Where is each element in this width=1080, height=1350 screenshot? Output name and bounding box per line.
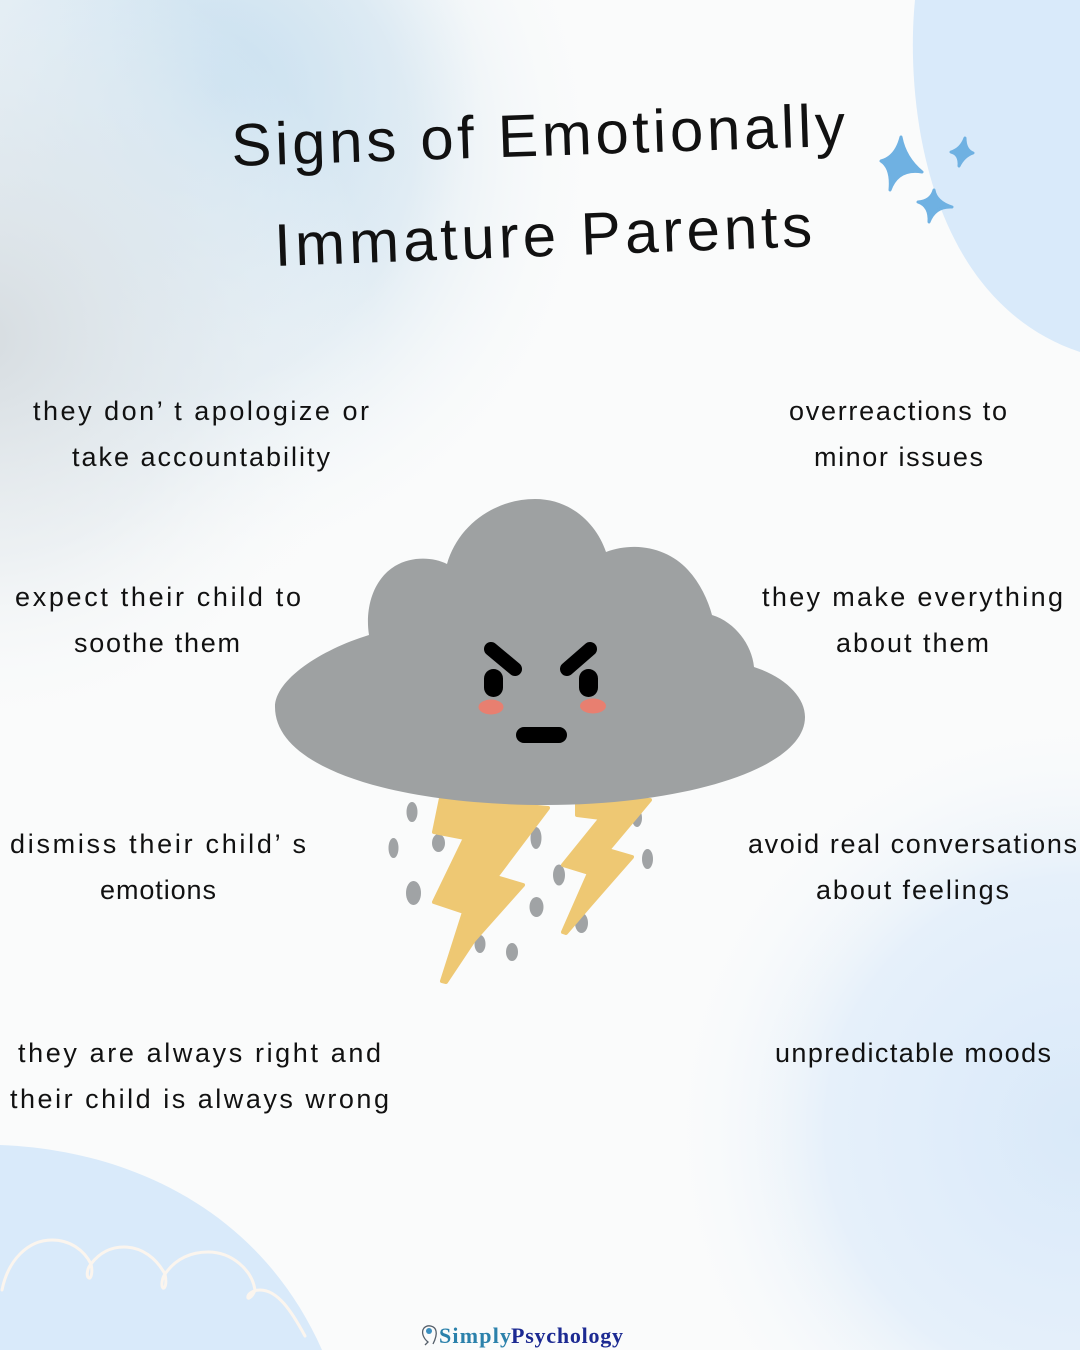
text block: dismiss emotions: [10, 829, 306, 905]
text block: moods: unpredictable moods: [775, 1038, 1051, 1068]
icon: sparkles: [881, 137, 973, 222]
text block: everything about them: about them: [836, 628, 989, 658]
text block: overreactions: [789, 396, 1007, 472]
face: [478, 649, 606, 743]
title: [230, 92, 846, 279]
logo: Simply Psychology: Psychology: [511, 1323, 623, 1348]
text block: soothe: expect their child to: [15, 582, 301, 612]
doodle: cloud outline: [2, 1240, 305, 1336]
text block: avoid conversations: avoid real conversations: [748, 829, 1077, 859]
text block: avoid conversations: about feelings: [816, 875, 1009, 905]
corner shape: bottom left: [0, 1145, 322, 1350]
text block: dismiss emotions: emotions: [100, 875, 216, 905]
text block: dismiss emotions: dismiss their child’ s: [10, 829, 306, 859]
logo: Simply Psychology: [423, 1323, 623, 1348]
text block: overreactions: overreactions to: [789, 396, 1007, 426]
text block: always right: they are always right and: [18, 1038, 381, 1068]
text block: apologize: take accountability: [72, 442, 330, 472]
text block: soothe: [15, 582, 301, 658]
icon: head: [423, 1326, 436, 1345]
text block: apologize: they don’ t apologize or: [33, 396, 369, 426]
icon: storm cloud: [275, 499, 805, 982]
text block: always right: their child is always wrong: [10, 1084, 389, 1114]
text block: everything about them: [762, 582, 1063, 658]
text block: avoid conversations: [748, 829, 1077, 905]
text block: soothe: soothe them: [74, 628, 240, 658]
text block: overreactions: minor issues: [814, 442, 983, 472]
title: Signs of Emotionally: [230, 92, 846, 179]
text block: apologize: [33, 396, 369, 472]
text block: always right: [10, 1038, 389, 1114]
cloud body: [275, 499, 805, 805]
logo: Simply Psychology: Simply: [439, 1323, 511, 1348]
text block: everything about them: they make everything: [762, 582, 1063, 612]
lightning bolts: [434, 798, 650, 982]
corner shape: top right: [913, 0, 1080, 352]
title: Immature Parents: [273, 192, 813, 279]
rain drops: [388, 802, 653, 961]
